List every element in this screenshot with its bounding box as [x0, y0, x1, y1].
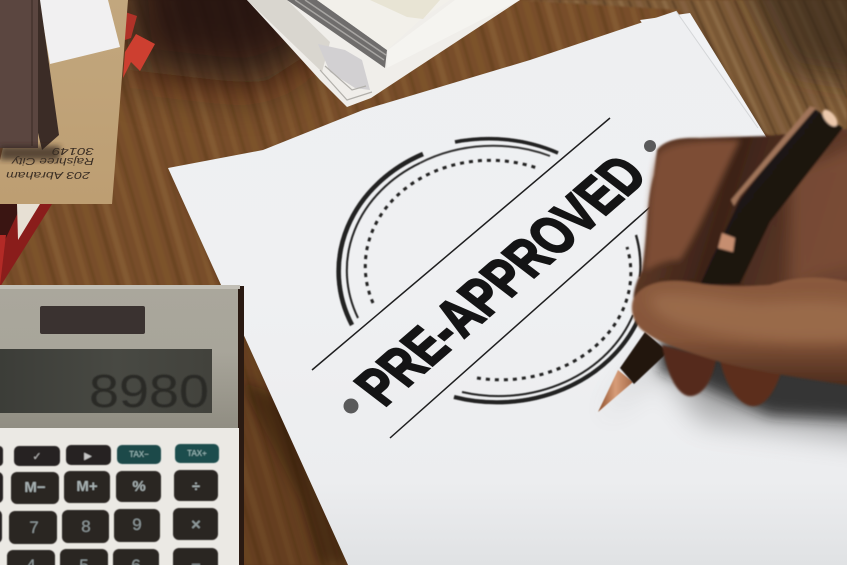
red book — [0, 204, 52, 287]
stamp text: PRE-APPROVED — [342, 145, 660, 416]
calculator shadow edge — [232, 286, 244, 565]
handwritten address: Rajshree City — [11, 155, 94, 166]
memory key row: M+ — [76, 478, 98, 495]
memory key row: M− — [24, 479, 46, 496]
handwritten address — [6, 145, 94, 180]
7 8 9 row: × — [191, 515, 201, 534]
memory key row: ÷ — [192, 478, 200, 495]
handwritten address: 30149 — [51, 145, 94, 156]
function key row: ▶ — [84, 451, 92, 462]
function key row: TAX+ — [187, 449, 207, 458]
handwritten address: 203 Abraham — [6, 169, 91, 180]
stamp: PRE-APPROVED — [312, 118, 660, 438]
keypad plate — [0, 428, 239, 565]
upper bundle — [287, 0, 387, 68]
solar panel — [40, 306, 145, 334]
memory key row — [0, 470, 218, 504]
red flags — [123, 12, 155, 78]
keypad keys — [0, 444, 219, 565]
lower fingers — [662, 345, 782, 406]
display — [0, 349, 212, 417]
wallet — [0, 0, 60, 160]
function key row: ✓ — [32, 451, 42, 463]
function key row — [0, 444, 219, 466]
7 8 9 row: 7 — [29, 518, 39, 537]
pen barrel — [700, 106, 843, 285]
white note — [39, 0, 120, 64]
4 5 6 row — [7, 548, 218, 565]
back of hand — [633, 128, 847, 385]
7 8 9 row — [0, 508, 218, 544]
thumb — [632, 278, 847, 387]
white paper sheets — [168, 11, 847, 565]
kraft envelope — [0, 0, 128, 204]
display: 8980 — [89, 365, 209, 417]
function key row: TAX− — [129, 450, 149, 459]
memory key row: % — [132, 478, 146, 495]
hand shadow on paper — [600, 340, 847, 445]
wallet, envelope and red book top left — [0, 0, 155, 287]
stamp ring arcs — [339, 139, 640, 402]
hand holding pen — [632, 106, 847, 406]
band lines — [312, 118, 650, 438]
band rivets — [344, 140, 656, 414]
7 8 9 row: 9 — [132, 515, 142, 534]
7 8 9 row: 8 — [81, 517, 91, 536]
pen tip — [598, 332, 668, 412]
calculator body — [0, 286, 238, 432]
lower pile — [247, 0, 520, 107]
calculator — [0, 285, 244, 565]
paper stack top centre — [247, 0, 520, 107]
